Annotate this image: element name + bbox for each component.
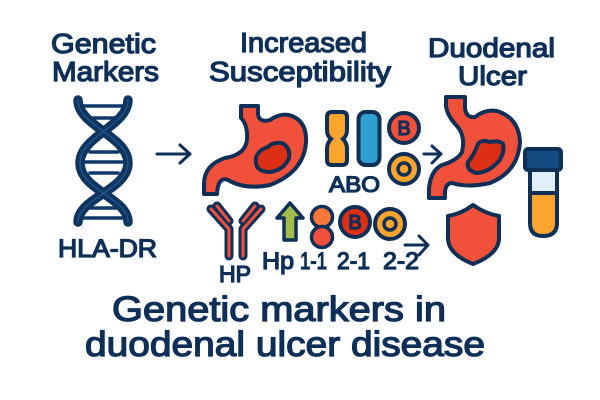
heading: genetic markers <box>51 28 159 87</box>
icon: test tube <box>525 149 561 236</box>
label: hp: HP <box>219 261 251 287</box>
icon: antibody <box>211 206 261 256</box>
arrow: abo to ulcer <box>424 146 441 163</box>
icon: blood cell b <box>389 113 419 143</box>
title: duodenal ulcer disease <box>85 325 485 364</box>
icon: shield <box>448 205 499 264</box>
arrow: markers to susceptibility <box>157 145 190 163</box>
heading: duodenal ulcer: Duodenal <box>428 33 555 63</box>
icon: abo chromosome blue <box>358 112 380 165</box>
labels: hp genotypes: Hp <box>262 248 294 275</box>
label: abo: ABO <box>329 172 380 197</box>
icon: abo chromosome orange <box>327 112 347 165</box>
heading: increased susceptibility <box>209 27 391 87</box>
icon: up arrow <box>277 203 303 240</box>
icon: stomach with small ulcer <box>204 106 306 194</box>
heading: increased susceptibility: Susceptibility <box>209 56 391 87</box>
labels: hp genotypes <box>262 248 419 275</box>
labels: hp genotypes: 2-1 <box>337 248 370 275</box>
heading: genetic markers: Markers <box>52 56 159 87</box>
heading: genetic markers: Genetic <box>51 28 156 59</box>
icon: hp 2-2 cell <box>375 209 405 239</box>
title: Genetic markers in <box>112 290 446 329</box>
icon: hp 2-1 cell <box>340 207 370 237</box>
icon: blood cell ring <box>389 154 419 184</box>
icon: hp 2-1 cell: B <box>348 212 362 234</box>
icon: dna helix <box>78 100 128 222</box>
icon: stomach with large ulcer <box>429 97 520 198</box>
title <box>85 290 485 364</box>
heading: increased susceptibility: Increased <box>240 27 367 58</box>
icon: blood cell b: B <box>397 118 411 140</box>
labels: hp genotypes: 1-1 <box>300 248 327 275</box>
icon: hp 1-1 cells <box>312 206 332 248</box>
heading: duodenal ulcer <box>428 33 555 91</box>
labels: hp genotypes: 2-2 <box>383 248 419 275</box>
arrow: hp to ulcer <box>405 236 428 255</box>
heading: duodenal ulcer: Ulcer <box>458 61 527 91</box>
label: hla-dr: HLA-DR <box>58 235 157 263</box>
